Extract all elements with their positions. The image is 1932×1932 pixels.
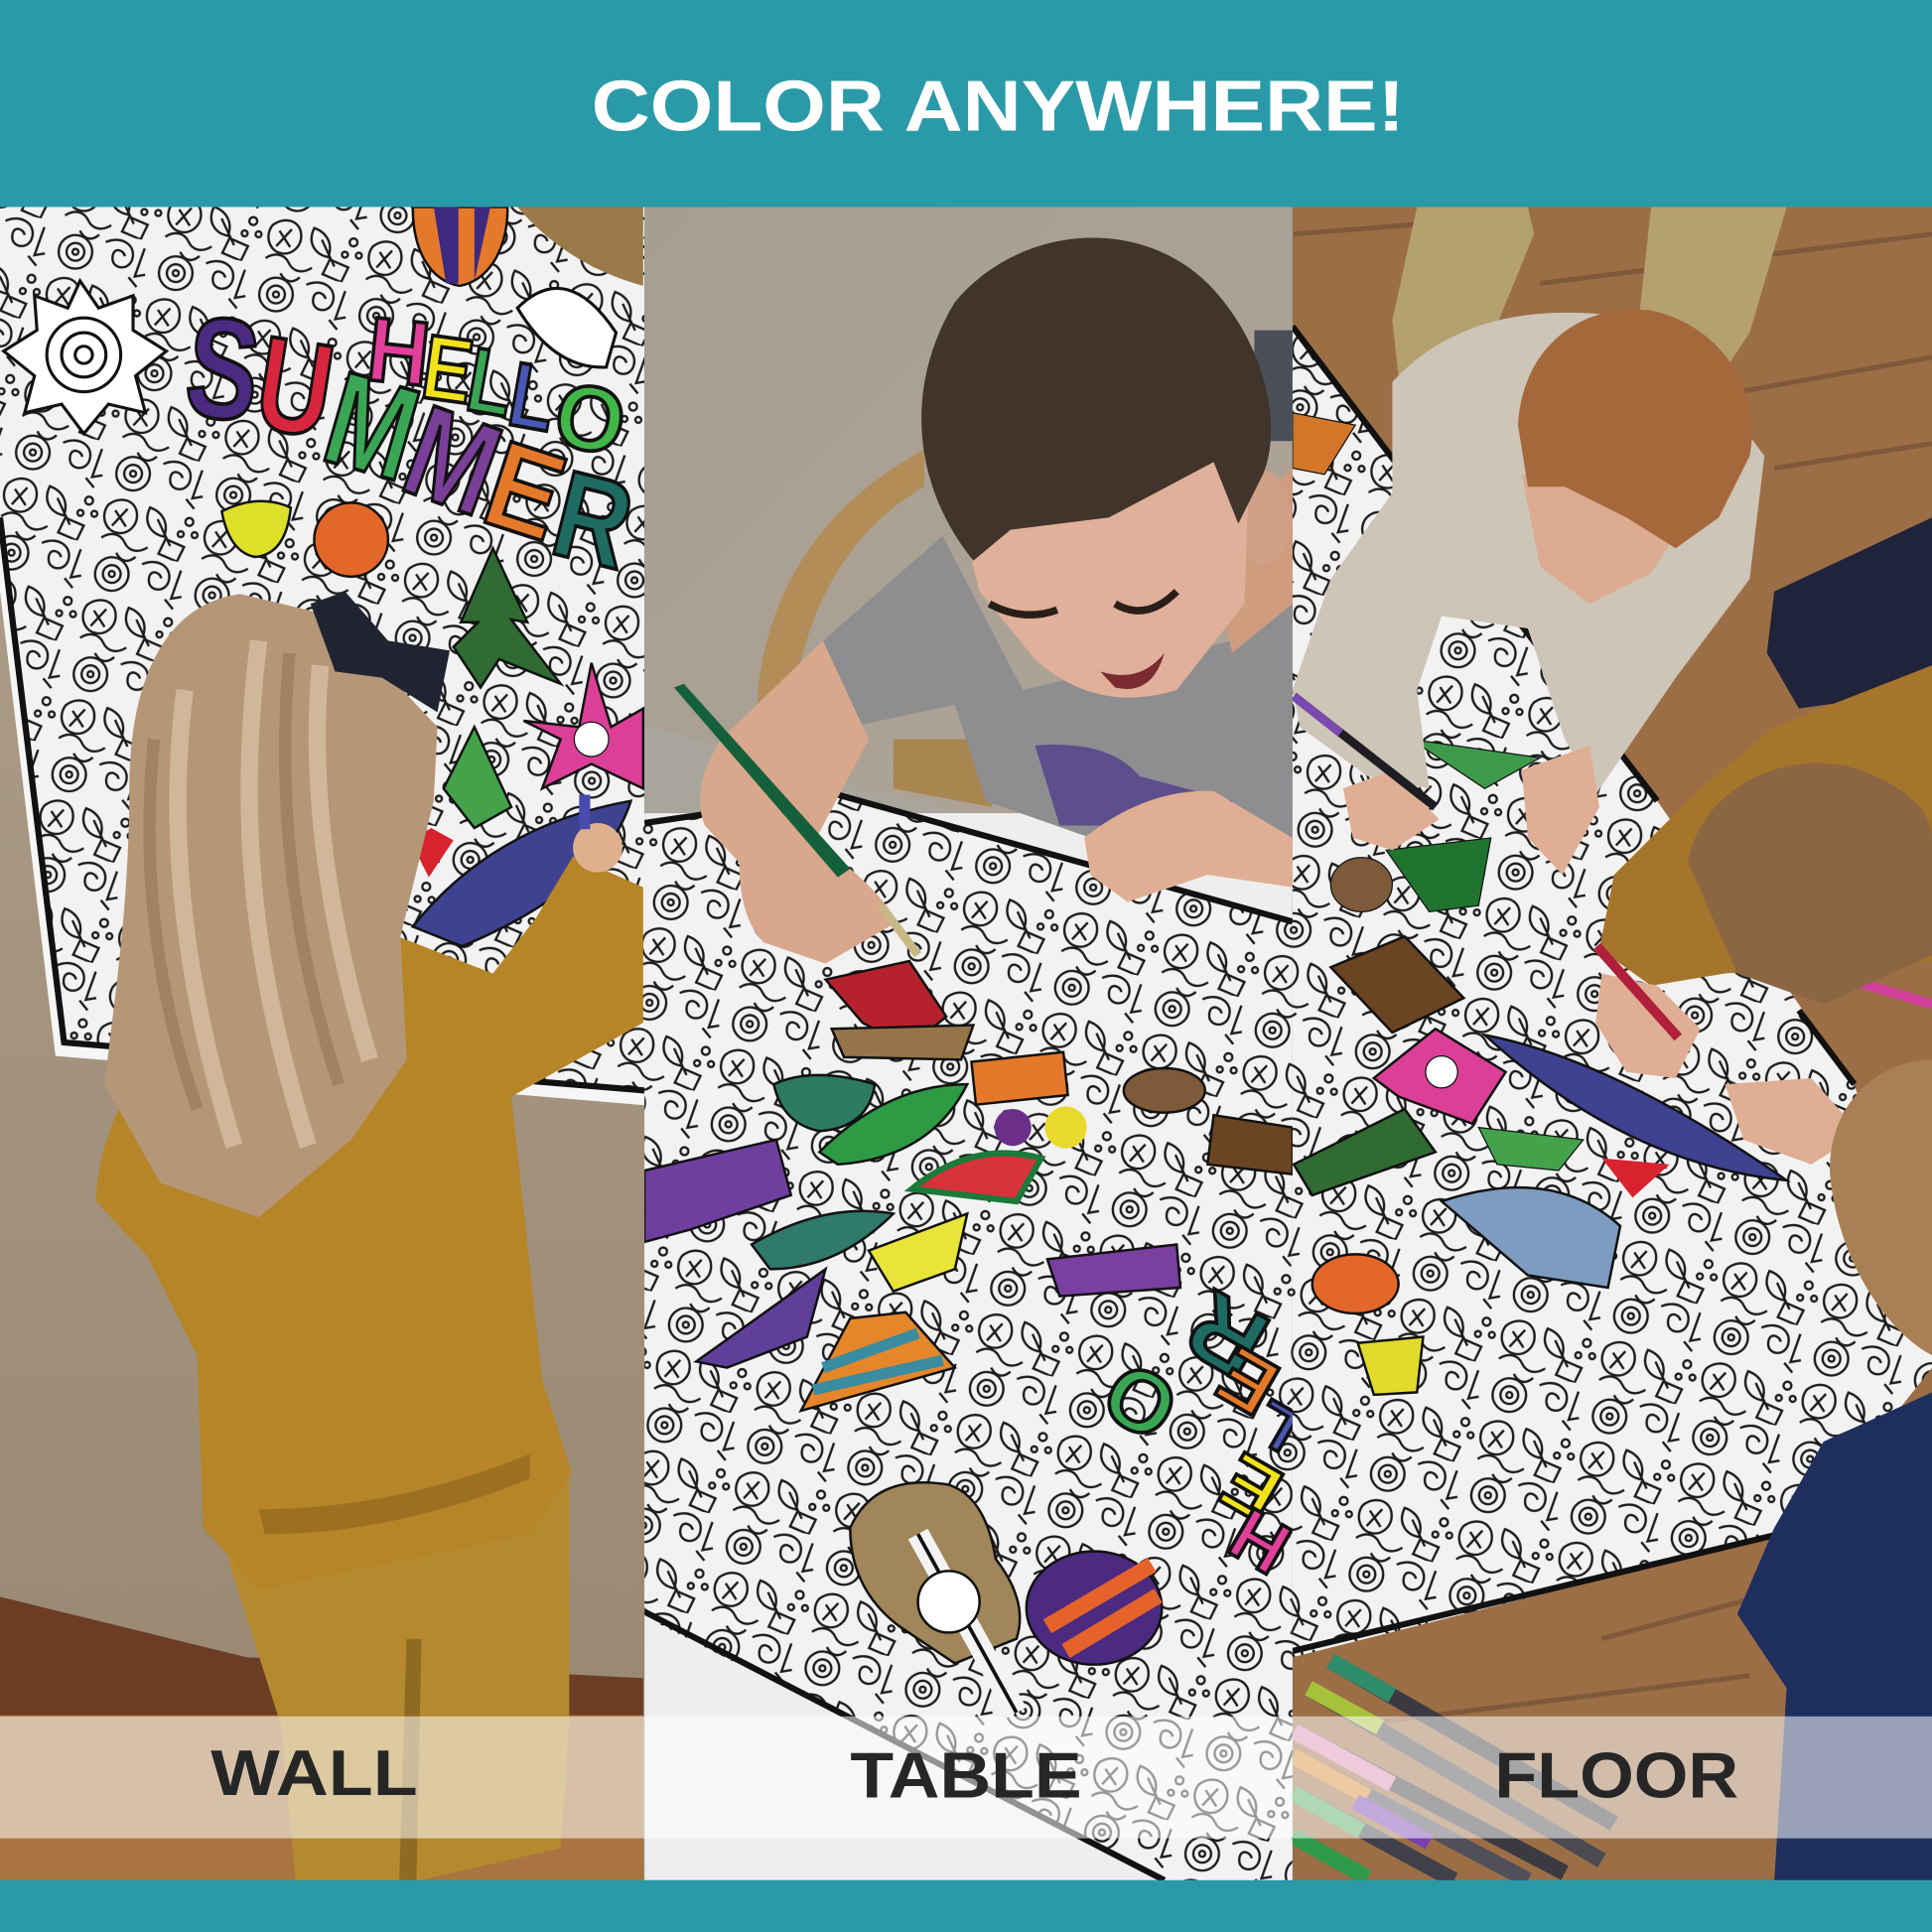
arm and drawing hand (700, 640, 894, 964)
poster lettering (187, 316, 630, 572)
poster lettering: O (1087, 1342, 1193, 1459)
khaki pants (1392, 207, 1787, 376)
footer bar (0, 1880, 1932, 1932)
floor poster (1293, 327, 1932, 1657)
right hand (1522, 746, 1599, 875)
poster lettering: S (179, 286, 267, 452)
poster lettering: L (501, 344, 563, 451)
child at bottom right (1725, 1059, 1932, 1880)
boy (674, 237, 1293, 964)
title: COLOR ANYWHERE! (592, 68, 1405, 147)
eyes and smile (990, 592, 1176, 615)
colored doodles (823, 959, 948, 1027)
table surface (644, 725, 1293, 936)
ear (1247, 471, 1279, 507)
panel: table photo (644, 207, 1310, 1880)
umbrella doodle (517, 288, 617, 367)
pants (228, 1466, 569, 1880)
crayon (579, 794, 590, 829)
label band: floor (1293, 1717, 1932, 1839)
window edge (1254, 331, 1293, 441)
hair (921, 237, 1271, 561)
poster lettering: L (1243, 1386, 1310, 1464)
marker (1294, 696, 1436, 807)
hand (573, 823, 622, 873)
poster lettering: R (1169, 1269, 1286, 1400)
colored doodles (1293, 413, 1355, 475)
poster lettering: O (547, 363, 632, 476)
poster lettering: E (1202, 1330, 1293, 1433)
hair (104, 594, 438, 1217)
wood floor (0, 1716, 643, 1880)
table poster (644, 794, 1310, 1880)
dark pants at right (1767, 517, 1932, 709)
child in mustard top (1595, 665, 1932, 1078)
left hand (1343, 770, 1440, 850)
label: table: TABLE (850, 1740, 1082, 1812)
chair (758, 450, 924, 704)
sweatshirt (96, 857, 643, 1589)
baseboard (0, 1596, 643, 1725)
resting hand (1084, 791, 1293, 901)
poster lettering: M (387, 377, 518, 543)
child lying down (1293, 207, 1787, 875)
header banner (0, 0, 1932, 207)
sun doodle (4, 281, 167, 434)
cream sweater (1293, 313, 1764, 794)
pencil (674, 684, 850, 878)
poster lettering (1107, 1286, 1293, 1577)
face (971, 463, 1248, 698)
poster lettering: H (1216, 1492, 1304, 1590)
girl (96, 592, 643, 1880)
gray shirt (823, 536, 1293, 850)
panel: floor photo (1293, 207, 1932, 1880)
label: wall: WALL (210, 1737, 418, 1809)
floor planks (1294, 215, 1932, 1725)
wall poster (0, 207, 645, 1105)
face (1522, 475, 1701, 604)
neck (1226, 469, 1293, 653)
poster lettering: M (310, 344, 434, 510)
poster lettering: E (416, 316, 480, 423)
label band: wall (0, 1717, 644, 1839)
poster lettering: E (470, 415, 580, 568)
label band: table (644, 1717, 1293, 1839)
poster lettering: H (362, 299, 435, 406)
poster lettering: L (460, 329, 521, 436)
label: floor: FLOOR (1494, 1740, 1738, 1812)
panel: wall photo (0, 207, 645, 1880)
hair bow (311, 592, 450, 712)
poster lettering: E (1206, 1437, 1296, 1539)
marker pens (1293, 1661, 1614, 1880)
ginger hair (1518, 310, 1752, 548)
poster lettering: U (247, 309, 343, 467)
poster lettering: R (541, 445, 645, 596)
colored doodles (413, 207, 507, 286)
